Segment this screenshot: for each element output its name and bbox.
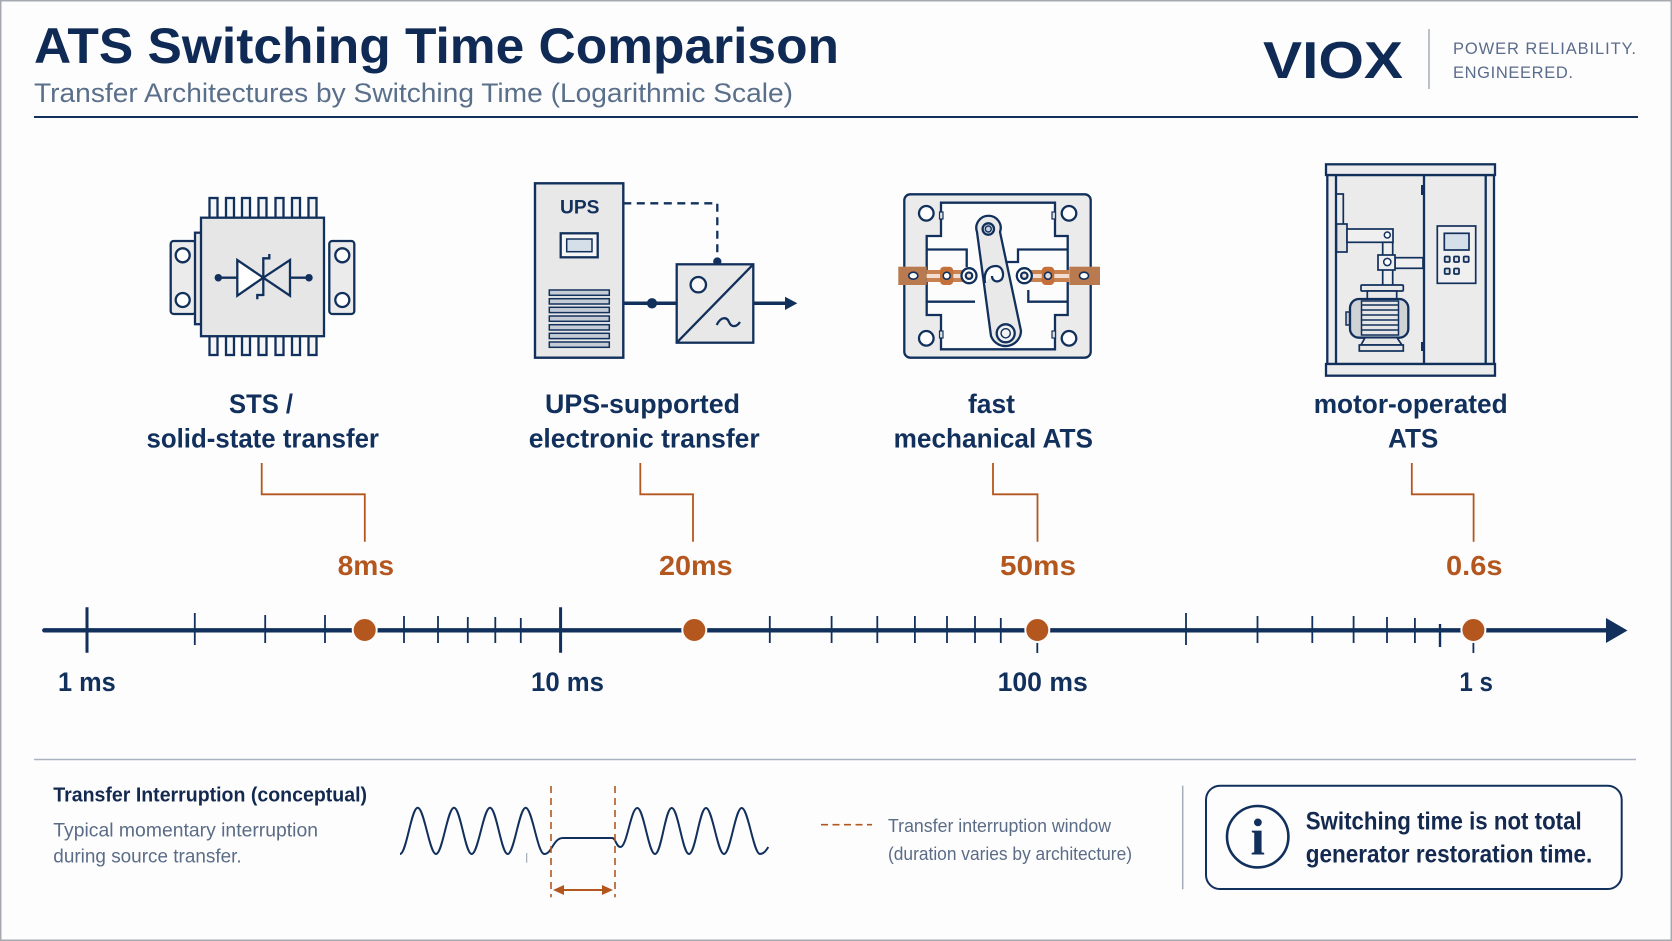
connector: motor-operated to 0.6s xyxy=(1412,463,1474,542)
title: ATS Switching Time Comparison xyxy=(34,18,839,74)
timeline axis xyxy=(44,607,1627,653)
transfer interruption text: Transfer Interruption (conceptual) xyxy=(53,784,367,807)
axis label: 1 ms: 1 ms xyxy=(58,667,116,697)
label: motor-operated xyxy=(1314,389,1508,453)
label: fast mechanical: mechanical ATS xyxy=(894,423,1093,453)
value: 20ms: 20ms xyxy=(659,550,733,581)
copper bus bars xyxy=(898,267,1100,285)
callout text: generator restoration time. xyxy=(1306,841,1592,869)
legend: interruption window: Transfer interruption window xyxy=(888,816,1112,836)
callout text: Switching time is not total xyxy=(1306,807,1582,835)
label: STS: solid-state transfer xyxy=(146,423,379,453)
logo: VIOX: VIOX xyxy=(1263,32,1403,90)
label: UPS-supported: UPS-supported xyxy=(545,389,740,419)
connector: fast mechanical to 50ms xyxy=(993,463,1038,542)
label: fast mechanical xyxy=(894,389,1093,453)
label: motor-operated: ATS xyxy=(1388,423,1438,453)
marker: 0.6s xyxy=(1461,618,1485,642)
marker: 50ms xyxy=(1025,618,1049,642)
waveform with interruption window xyxy=(400,786,768,897)
label: fast mechanical: fast xyxy=(968,389,1015,419)
marker: 20ms xyxy=(682,618,706,642)
icon: UPS with converter xyxy=(535,183,797,358)
subtitle: Transfer Architectures by Switching Time (Logarithmic Scale) xyxy=(34,78,793,108)
tagline xyxy=(1453,40,1636,82)
connector: STS to 8ms xyxy=(262,463,365,542)
header rule xyxy=(34,116,1638,118)
label: STS: STS / xyxy=(229,389,294,419)
label: UPS-supported: electronic transfer xyxy=(529,423,760,453)
connector: UPS to 20ms xyxy=(640,463,693,542)
icon: solid-state transfer switch xyxy=(171,198,354,355)
transfer interruption text: Typical momentary interruption xyxy=(53,820,318,842)
legend: interruption window: (duration varies by architecture) xyxy=(888,844,1132,864)
icon: UPS with converter: UPS xyxy=(560,196,600,218)
icon: info xyxy=(1227,806,1288,867)
vertical divider xyxy=(1182,786,1184,889)
tagline: POWER RELIABILITY. xyxy=(1453,40,1636,58)
callout text xyxy=(1306,807,1592,869)
value: 8ms: 8ms xyxy=(338,550,394,581)
icon: motor-operated ATS cabinet xyxy=(1326,164,1495,376)
axis label: 1 s: 1 s xyxy=(1459,667,1493,697)
legend: interruption window xyxy=(821,816,1132,864)
value: 50ms: 50ms xyxy=(1000,550,1076,581)
value: 0.6s: 0.6s xyxy=(1446,550,1502,581)
header xyxy=(34,18,1638,117)
label: motor-operated: motor-operated xyxy=(1314,389,1508,419)
marker: 8ms xyxy=(353,618,377,642)
transfer interruption text xyxy=(53,784,367,868)
axis label: 10 ms: 10 ms xyxy=(531,667,604,697)
axis label: 100 ms: 100 ms xyxy=(998,667,1088,697)
footer divider xyxy=(34,758,1636,760)
label: UPS-supported xyxy=(529,389,760,453)
tagline: ENGINEERED. xyxy=(1453,64,1573,82)
icon: fast mechanical ATS xyxy=(898,194,1100,358)
icon: info: i xyxy=(1250,810,1265,866)
callout: switching time note xyxy=(1206,786,1622,889)
label: STS xyxy=(146,389,379,453)
logo divider xyxy=(1428,29,1430,89)
transfer interruption text: during source transfer. xyxy=(53,846,242,868)
